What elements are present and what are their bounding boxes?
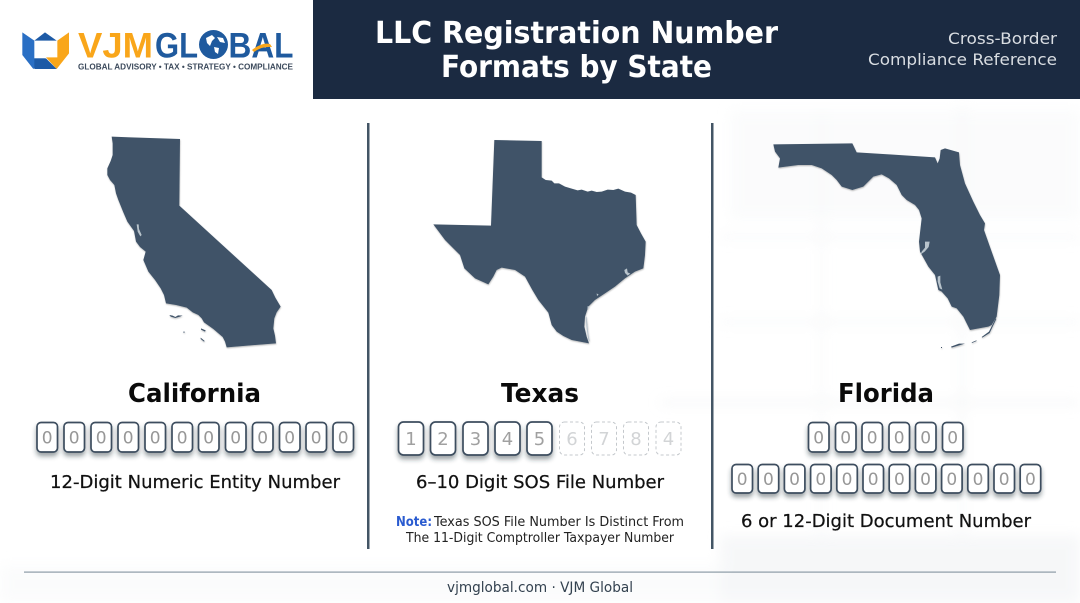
digit boxes: 12 zeros: 0 xyxy=(284,428,295,448)
subtitle xyxy=(868,29,1057,69)
logo wordmark: VJM xyxy=(78,26,153,66)
digit boxes: 6 zeros: 0 xyxy=(947,428,958,448)
note: Texas: Note: xyxy=(396,515,432,530)
divider xyxy=(711,123,714,549)
digit boxes: 12345 solid and 6784 dashed: 5 xyxy=(534,429,545,450)
digit boxes: 12 zeros: 0 xyxy=(1025,470,1036,490)
panel: California xyxy=(37,137,354,493)
digit boxes: 12 zeros: 0 xyxy=(230,428,241,448)
digit boxes: 12345 solid and 6784 dashed xyxy=(398,422,681,455)
logo wordmark xyxy=(78,26,294,66)
digit boxes: 6 zeros: 0 xyxy=(867,428,878,448)
digit boxes: 12 zeros: 0 xyxy=(123,428,134,448)
digit boxes: 12 zeros: 0 xyxy=(815,470,826,490)
heading: Texas: Texas xyxy=(501,379,579,409)
digit boxes: 12 zeros: 0 xyxy=(763,470,774,490)
digit boxes: 12 zeros: 0 xyxy=(946,470,957,490)
heading: California: California xyxy=(128,379,261,409)
digit boxes: 12 zeros: 0 xyxy=(203,428,214,448)
title: Formats by State xyxy=(441,50,712,85)
title xyxy=(375,16,778,85)
logo tagline: GLOBAL ADVISORY • TAX • STRATEGY • COMPLIANCE xyxy=(78,62,293,72)
digit boxes: 12 zeros: 0 xyxy=(257,428,268,448)
digit boxes: 12345 solid and 6784 dashed: 3 xyxy=(470,429,481,450)
note: Texas: Texas SOS File Number Is Distinct From xyxy=(433,515,684,530)
note: Texas: The 11-Digit Comptroller Taxpayer Number xyxy=(405,531,675,546)
digit boxes: 12345 solid and 6784 dashed: 6 xyxy=(566,429,578,450)
digit boxes: 12345 solid and 6784 dashed: 4 xyxy=(502,429,513,450)
digit boxes: 12 zeros xyxy=(37,422,354,452)
digit boxes: 12 zeros: 0 xyxy=(999,470,1010,490)
digit boxes: 12 zeros: 0 xyxy=(894,470,905,490)
map: California xyxy=(107,137,281,347)
logo: VJM Global xyxy=(22,26,294,72)
footer text: vjmglobal.com · VJM Global xyxy=(447,580,633,596)
caption: California: 12-Digit Numeric Entity Number xyxy=(50,472,341,493)
digit boxes: 12345 solid and 6784 dashed: 2 xyxy=(437,429,449,450)
digit boxes: 12 zeros: 0 xyxy=(311,428,322,448)
digit boxes: 12 zeros: 0 xyxy=(920,470,931,490)
digit boxes: 12 zeros: 0 xyxy=(737,470,748,490)
panel: Texas xyxy=(396,140,684,546)
panel: Florida xyxy=(732,143,1041,532)
digit boxes: 6 zeros: 0 xyxy=(894,428,905,448)
digit boxes: 12 zeros: 0 xyxy=(96,428,107,448)
digit boxes: 12 zeros: 0 xyxy=(789,470,800,490)
digit boxes: 12 zeros: 0 xyxy=(42,428,53,448)
digit boxes: 12 zeros: 0 xyxy=(150,428,161,448)
digit boxes: 6 zeros xyxy=(808,422,963,452)
header band xyxy=(313,0,1080,99)
subtitle: Cross-Border xyxy=(948,29,1057,48)
digit boxes: 12 zeros xyxy=(732,464,1041,493)
divider xyxy=(367,123,370,549)
digit boxes: 12 zeros: 0 xyxy=(177,428,188,448)
caption: Texas: 6–10 Digit SOS File Number xyxy=(416,472,665,493)
map: Texas xyxy=(433,140,646,343)
digit boxes: 12 zeros: 0 xyxy=(69,428,80,448)
digit boxes: 12345 solid and 6784 dashed: 8 xyxy=(630,429,642,450)
digit boxes: 12345 solid and 6784 dashed: 4 xyxy=(663,429,674,450)
title: LLC Registration Number xyxy=(375,16,778,51)
digit boxes: 6 zeros: 0 xyxy=(840,428,851,448)
icon: logo house mark xyxy=(22,32,69,69)
logo wordmark: GL xyxy=(155,26,198,66)
heading: Florida: Florida xyxy=(838,379,934,409)
note: Texas xyxy=(396,515,684,546)
map: Florida xyxy=(773,143,1000,348)
digit boxes: 12 zeros: 0 xyxy=(338,428,349,448)
digit boxes: 12 zeros: 0 xyxy=(973,470,983,490)
subtitle: Compliance Reference xyxy=(868,50,1057,69)
logo wordmark: BAL xyxy=(228,26,294,66)
digit boxes: 12 zeros: 0 xyxy=(868,470,879,490)
caption: Florida: 6 or 12-Digit Document Number xyxy=(741,511,1032,532)
digit boxes: 6 zeros: 0 xyxy=(813,428,824,448)
digit boxes: 12345 solid and 6784 dashed: 7 xyxy=(598,429,610,450)
digit boxes: 6 zeros: 0 xyxy=(920,428,931,448)
digit boxes: 12 zeros: 0 xyxy=(842,470,852,490)
digit boxes: 12345 solid and 6784 dashed: 1 xyxy=(405,429,417,450)
